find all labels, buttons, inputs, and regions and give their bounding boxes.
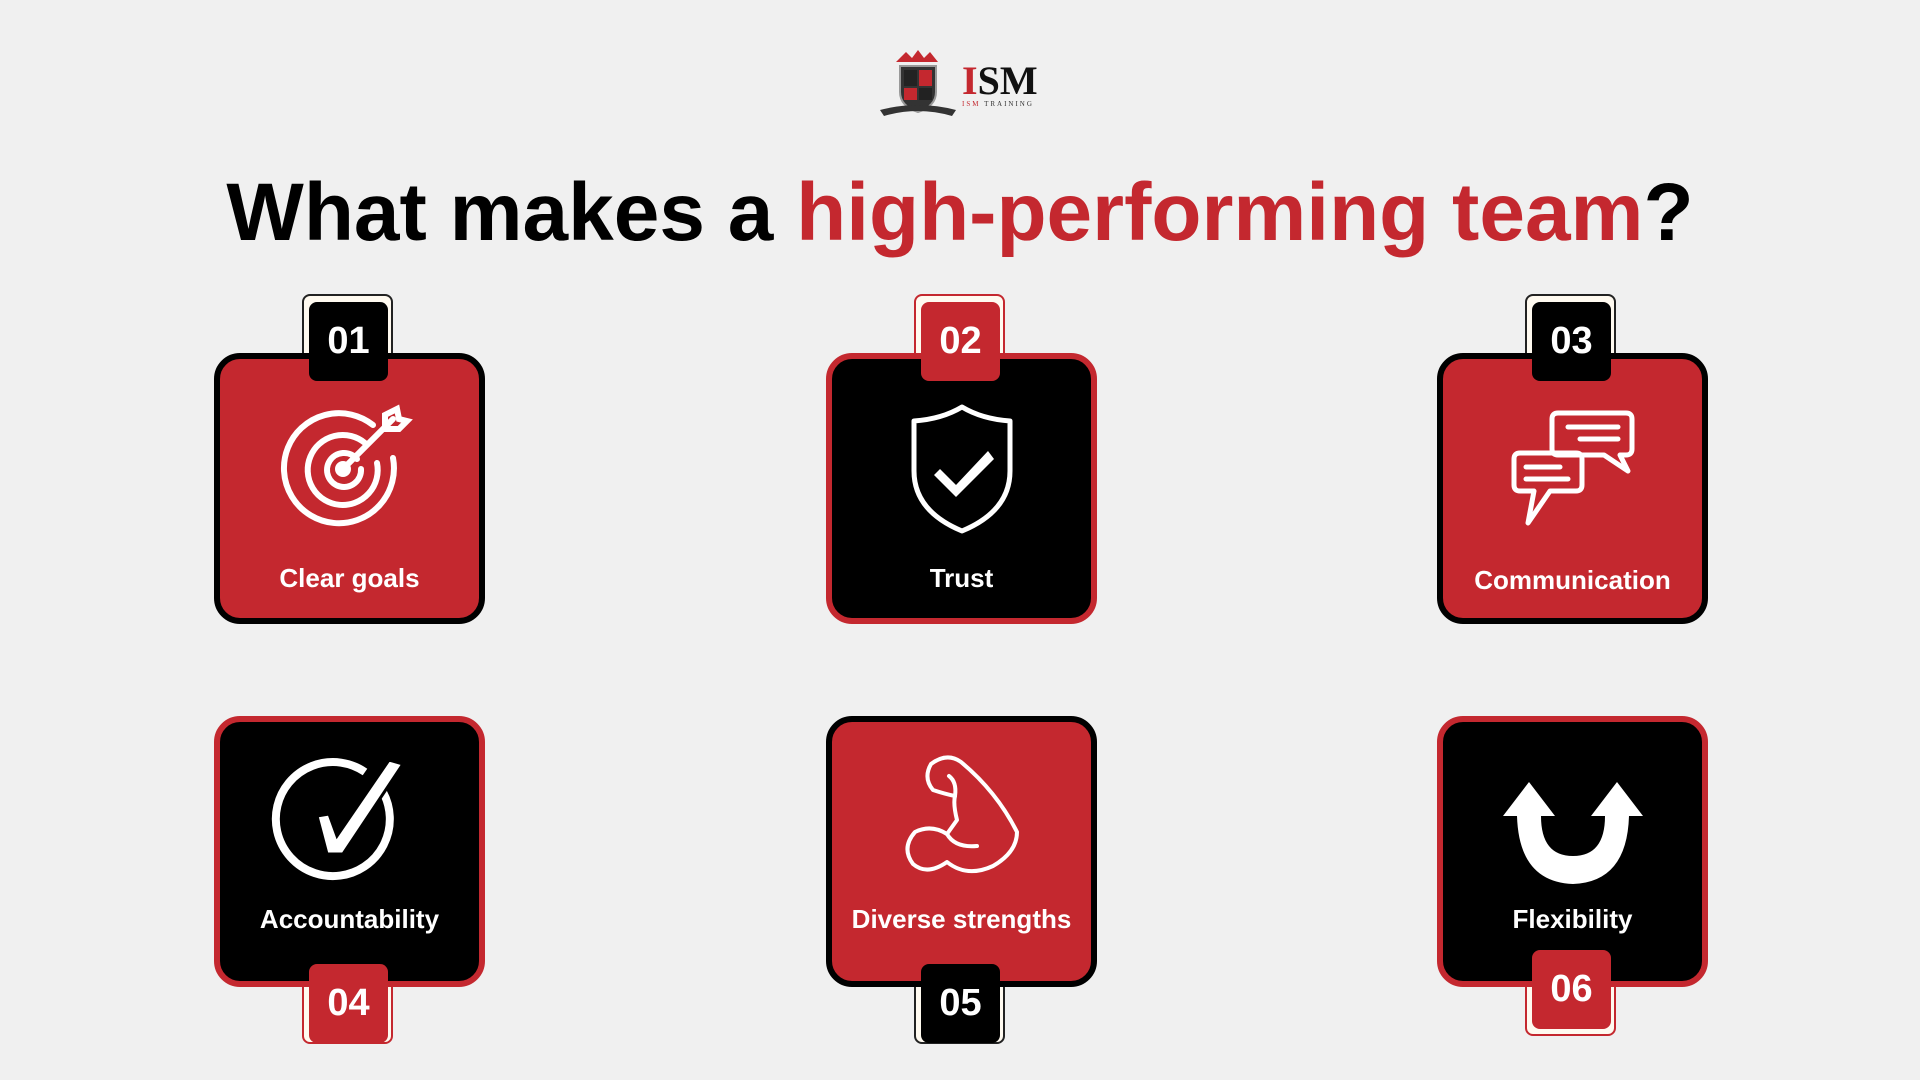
card 04: [214, 716, 485, 1044]
tab 01: 01: [327, 320, 370, 362]
label: Flexibility: [1513, 904, 1632, 934]
tab 06: 06: [1550, 968, 1593, 1010]
icon: shield: [912, 404, 1012, 534]
card 06: [1437, 716, 1708, 1036]
card 05: [826, 716, 1097, 1044]
icon: flexed arm: [905, 755, 1019, 874]
label: Accountability: [260, 904, 439, 934]
card 01: [214, 294, 485, 624]
label: Diverse strengths: [852, 904, 1071, 934]
icon: U-turn arrows: [1503, 782, 1643, 884]
logo: [880, 50, 1038, 116]
label: Trust: [930, 563, 993, 593]
title: What makes a high-performing team?: [226, 167, 1694, 258]
tab 03: [1532, 302, 1611, 381]
tab 05: 05: [939, 982, 982, 1024]
logo: ISM: [962, 58, 1038, 103]
card 03: [1437, 294, 1708, 624]
tab 03: 03: [1550, 320, 1593, 362]
tab 05: [921, 964, 1000, 1043]
logo: ISM TRAINING: [962, 100, 1034, 108]
tab 04: [309, 964, 388, 1043]
card 02: [826, 294, 1097, 624]
tab 02: [921, 302, 1000, 381]
tab 02: 02: [939, 320, 982, 362]
tab 04: 04: [327, 982, 370, 1024]
icon: target: [280, 404, 413, 526]
icon: check circle: [272, 758, 401, 880]
tab 01: [309, 302, 388, 381]
tab 06: [1532, 950, 1611, 1029]
label: Clear goals: [279, 563, 420, 593]
label: Communication: [1474, 565, 1671, 595]
icon: chat bubbles: [1512, 410, 1634, 526]
